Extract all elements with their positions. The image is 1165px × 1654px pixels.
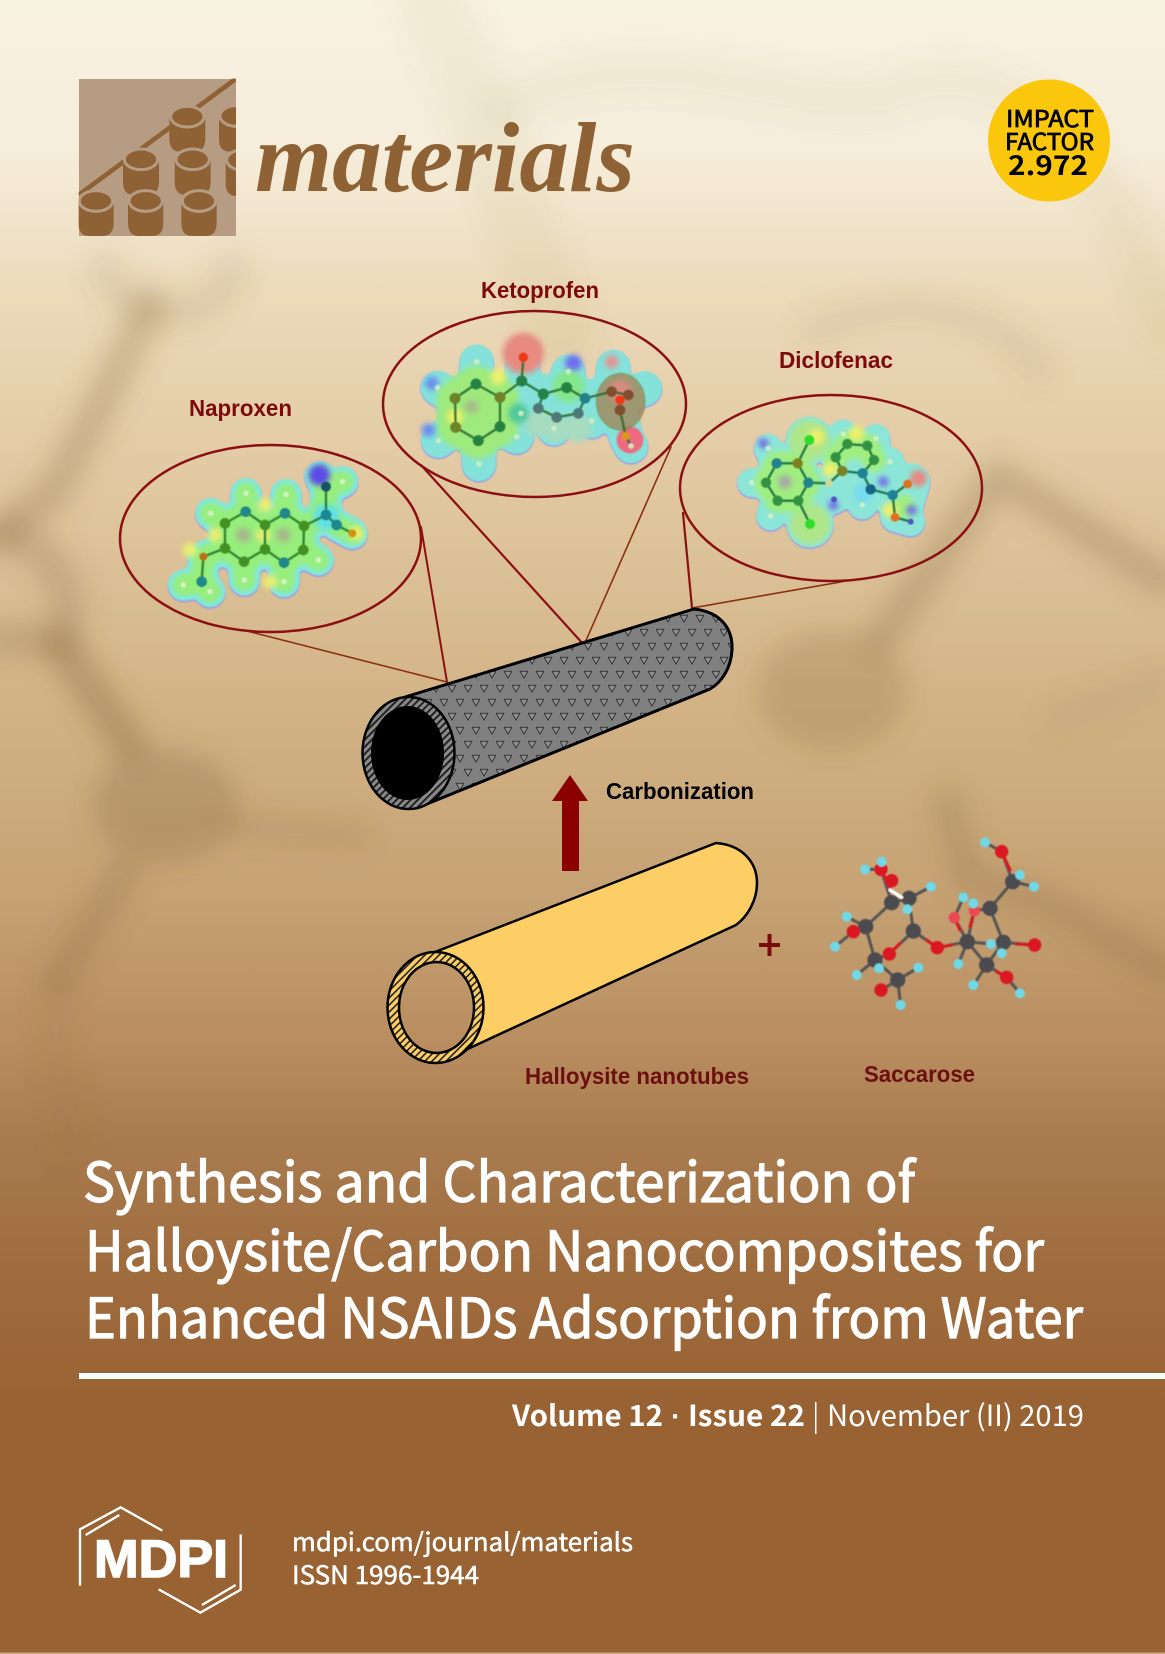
article title <box>83 1138 1084 1354</box>
journal url: mdpi.com/journal/materials <box>292 1523 633 1559</box>
label: Naproxen: Naproxen <box>189 395 292 421</box>
zoom lines from tube to callouts <box>243 447 846 682</box>
impact factor badge: 2.972 <box>1008 144 1088 183</box>
ISSN: ISSN 1996-1944 <box>292 1556 479 1592</box>
article title: Synthesis and Characterization of <box>83 1138 917 1218</box>
article title: Halloysite/Carbon Nanocomposites for <box>85 1207 1045 1287</box>
title rule <box>79 1373 1165 1379</box>
impact factor badge: FACTOR <box>1005 123 1094 157</box>
impact factor badge: IMPACT <box>1006 100 1094 134</box>
callout: Ketoprofen molecule <box>383 311 686 497</box>
MDPI logo: MDPI <box>94 1530 228 1589</box>
label: Diclofenac: Diclofenac <box>779 347 893 373</box>
label: Saccarose: Saccarose <box>864 1061 975 1087</box>
arrow: carbonization <box>552 775 588 871</box>
callout: Naproxen molecule <box>120 445 421 632</box>
label: Carbonization: Carbonization <box>606 778 754 804</box>
plus sign <box>759 934 780 956</box>
halloysite nanotube <box>388 843 757 1063</box>
volume and issue <box>511 1393 805 1435</box>
background ghost molecule <box>0 0 1165 1150</box>
journal logo icon <box>78 78 236 236</box>
MDPI logo <box>80 1507 241 1613</box>
saccharose ball and stick model <box>835 842 1035 1005</box>
volume and issue: Volume 12 <box>511 1393 663 1435</box>
carbon nanotube <box>362 609 732 809</box>
article title: Enhanced NSAIDs Adsorption from Water <box>85 1274 1084 1354</box>
impact factor badge <box>988 80 1110 202</box>
journal name: materials <box>255 102 635 213</box>
label: Halloysite nanotubes: Halloysite nanotubes <box>525 1063 749 1089</box>
volume and issue: · <box>671 1401 681 1433</box>
volume and issue: Issue 22 <box>688 1393 805 1435</box>
callout: Diclofenac molecule <box>680 395 982 581</box>
date: November (II) 2019 <box>827 1393 1084 1435</box>
label: Ketoprofen: Ketoprofen <box>481 277 599 303</box>
